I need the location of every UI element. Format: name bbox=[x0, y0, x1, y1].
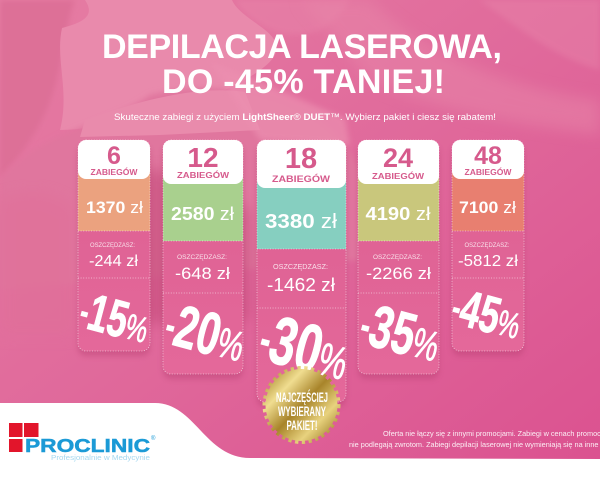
logo: Proclinic: Profesjonalnie w Medycynie bbox=[51, 455, 150, 462]
panel: 18 zabiegów: - bbox=[255, 314, 277, 364]
panel: 48 zabiegów: 7100 zł bbox=[459, 198, 516, 217]
panel: 6 zabiegów: OSZCZĘDZASZ: bbox=[90, 242, 135, 249]
panel: 48 zabiegów: -5812 zł bbox=[458, 253, 519, 270]
title bbox=[102, 28, 502, 101]
panel: 18 zabiegów: -1462 zł bbox=[267, 274, 335, 295]
panel: 18 zabiegów: 18 bbox=[285, 143, 317, 175]
panel: 18 zabiegów bbox=[256, 140, 348, 407]
panel: 18 zabiegów: 30 bbox=[262, 302, 331, 389]
panel: 12 zabiegów: OSZCZĘDZASZ: bbox=[177, 254, 227, 261]
panel: 6 zabiegów: 6 bbox=[107, 142, 121, 170]
panel: 12 zabiegów: ZABIEGÓW bbox=[177, 169, 230, 180]
gold badge: WYBIERANY bbox=[278, 404, 326, 419]
gold badge: NAJCZĘŚCIEJ bbox=[276, 390, 328, 405]
logo: Proclinic: ® bbox=[151, 435, 156, 442]
title: DO -45% TANIEJ! bbox=[162, 63, 445, 101]
panel: 12 zabiegów: 2580 zł bbox=[171, 203, 234, 224]
panel: 12 zabiegów: - bbox=[161, 303, 181, 349]
panel: 12 zabiegów: 20 bbox=[167, 292, 229, 369]
panel: 48 zabiegów: % bbox=[493, 302, 525, 347]
panel: 48 zabiegów bbox=[452, 140, 524, 356]
panel: 24 zabiegów: 4190 zł bbox=[366, 204, 430, 224]
panel: 24 zabiegów bbox=[356, 140, 440, 379]
panel: 6 zabiegów: ZABIEGÓW bbox=[90, 166, 138, 177]
white corner shape at bottom bbox=[0, 403, 600, 480]
panel: 12 zabiegów: % bbox=[212, 318, 249, 371]
panel: 48 zabiegów: OSZCZĘDZASZ: bbox=[464, 242, 510, 249]
logo: Proclinic: PROCLINIC bbox=[25, 436, 150, 456]
gold badge: PAKIET! bbox=[286, 418, 318, 433]
panel: 24 zabiegów: OSZCZĘDZASZ: bbox=[373, 254, 422, 261]
panel: 6 zabiegów: 15 bbox=[82, 284, 135, 350]
logo: Proclinic bbox=[9, 423, 156, 462]
panel: 6 zabiegów: % bbox=[121, 306, 153, 351]
panel: 12 zabiegów: 12 bbox=[187, 142, 219, 173]
panel: 48 zabiegów: - bbox=[448, 287, 466, 328]
panel: 6 zabiegów: -244 zł bbox=[89, 253, 139, 270]
panel: 18 zabiegów: ZABIEGÓW bbox=[272, 173, 330, 185]
panel: 24 zabiegów: - bbox=[356, 303, 376, 349]
panel: 48 zabiegów: 48 bbox=[474, 142, 502, 170]
panel: 18 zabiegów: OSZCZĘDZASZ: bbox=[273, 264, 328, 271]
panel: 18 zabiegów: 3380 zł bbox=[265, 210, 337, 233]
panel: 24 zabiegów: ZABIEGÓW bbox=[372, 170, 425, 181]
panel: 12 zabiegów: -648 zł bbox=[175, 264, 230, 283]
panel: 24 zabiegów: % bbox=[407, 318, 444, 371]
title: DEPILACJA LASEROWA, bbox=[102, 28, 502, 66]
panel: 6 zabiegów bbox=[74, 140, 156, 356]
panel: 48 zabiegów: 45 bbox=[454, 280, 507, 346]
panel: 48 zabiegów: ZABIEGÓW bbox=[464, 166, 512, 177]
panel: 18 zabiegów: % bbox=[313, 333, 353, 390]
gold badge bbox=[264, 368, 338, 442]
panel: 6 zabiegów: - bbox=[76, 291, 94, 332]
panel: 24 zabiegów: -2266 zł bbox=[366, 264, 431, 283]
subtitle: Skuteczne zabiegi z użyciem LightSheer® DUET™. Wybierz pakiet i ciesz się rabatem! bbox=[114, 112, 496, 123]
footnote bbox=[349, 429, 600, 449]
panel: 6 zabiegów: 1370 zł bbox=[86, 198, 143, 217]
panel: 12 zabiegów bbox=[162, 140, 244, 380]
panel: 24 zabiegów: 24 bbox=[383, 143, 413, 173]
panel: 24 zabiegów: 35 bbox=[362, 292, 424, 369]
